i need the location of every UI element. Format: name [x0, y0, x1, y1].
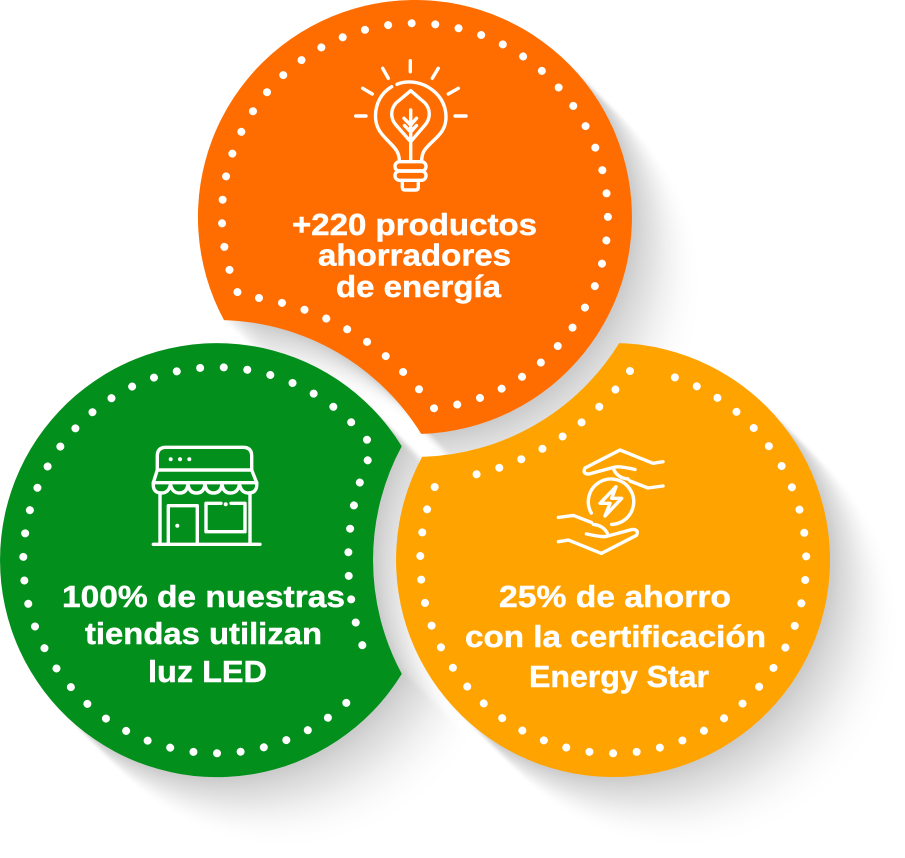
panel: orange circle, energy saving products	[198, 0, 632, 434]
dotted ring amber	[420, 371, 806, 753]
dotted ring green	[23, 367, 371, 753]
text: 100% de nuestras tiendas utilizan luz LED: tiendas utilizan	[85, 617, 322, 651]
panel: amber circle, Energy Star savings	[396, 343, 830, 777]
orange circle background	[198, 0, 632, 434]
text: 25% de ahorro con la certificación Energy Star: 25% de ahorro	[499, 580, 731, 614]
icon: hands holding energy	[558, 450, 663, 553]
text: +220 productos ahorradores de energía: +220 productos	[292, 208, 537, 242]
icon: store front	[153, 447, 260, 544]
icon: light bulb with leaf	[356, 61, 466, 190]
text: 25% de ahorro con la certificación Energy Star: con la certificación	[465, 620, 766, 654]
green circle background	[0, 343, 402, 777]
dotted ring orange	[222, 23, 608, 408]
text: 100% de nuestras tiendas utilizan luz LED	[62, 580, 345, 689]
text: +220 productos ahorradores de energía: ahorradores	[318, 238, 511, 272]
text: 100% de nuestras tiendas utilizan luz LED: luz LED	[148, 655, 267, 689]
text: 100% de nuestras tiendas utilizan luz LED: 100% de nuestras	[62, 580, 345, 614]
text: +220 productos ahorradores de energía	[292, 208, 537, 304]
amber circle background	[396, 343, 830, 777]
text: 25% de ahorro con la certificación Energy Star	[465, 580, 766, 694]
text: 25% de ahorro con la certificación Energy Star: Energy Star	[529, 660, 709, 694]
text: +220 productos ahorradores de energía: de energía	[336, 270, 502, 304]
panel: green circle, LED lighting in stores	[0, 343, 402, 777]
